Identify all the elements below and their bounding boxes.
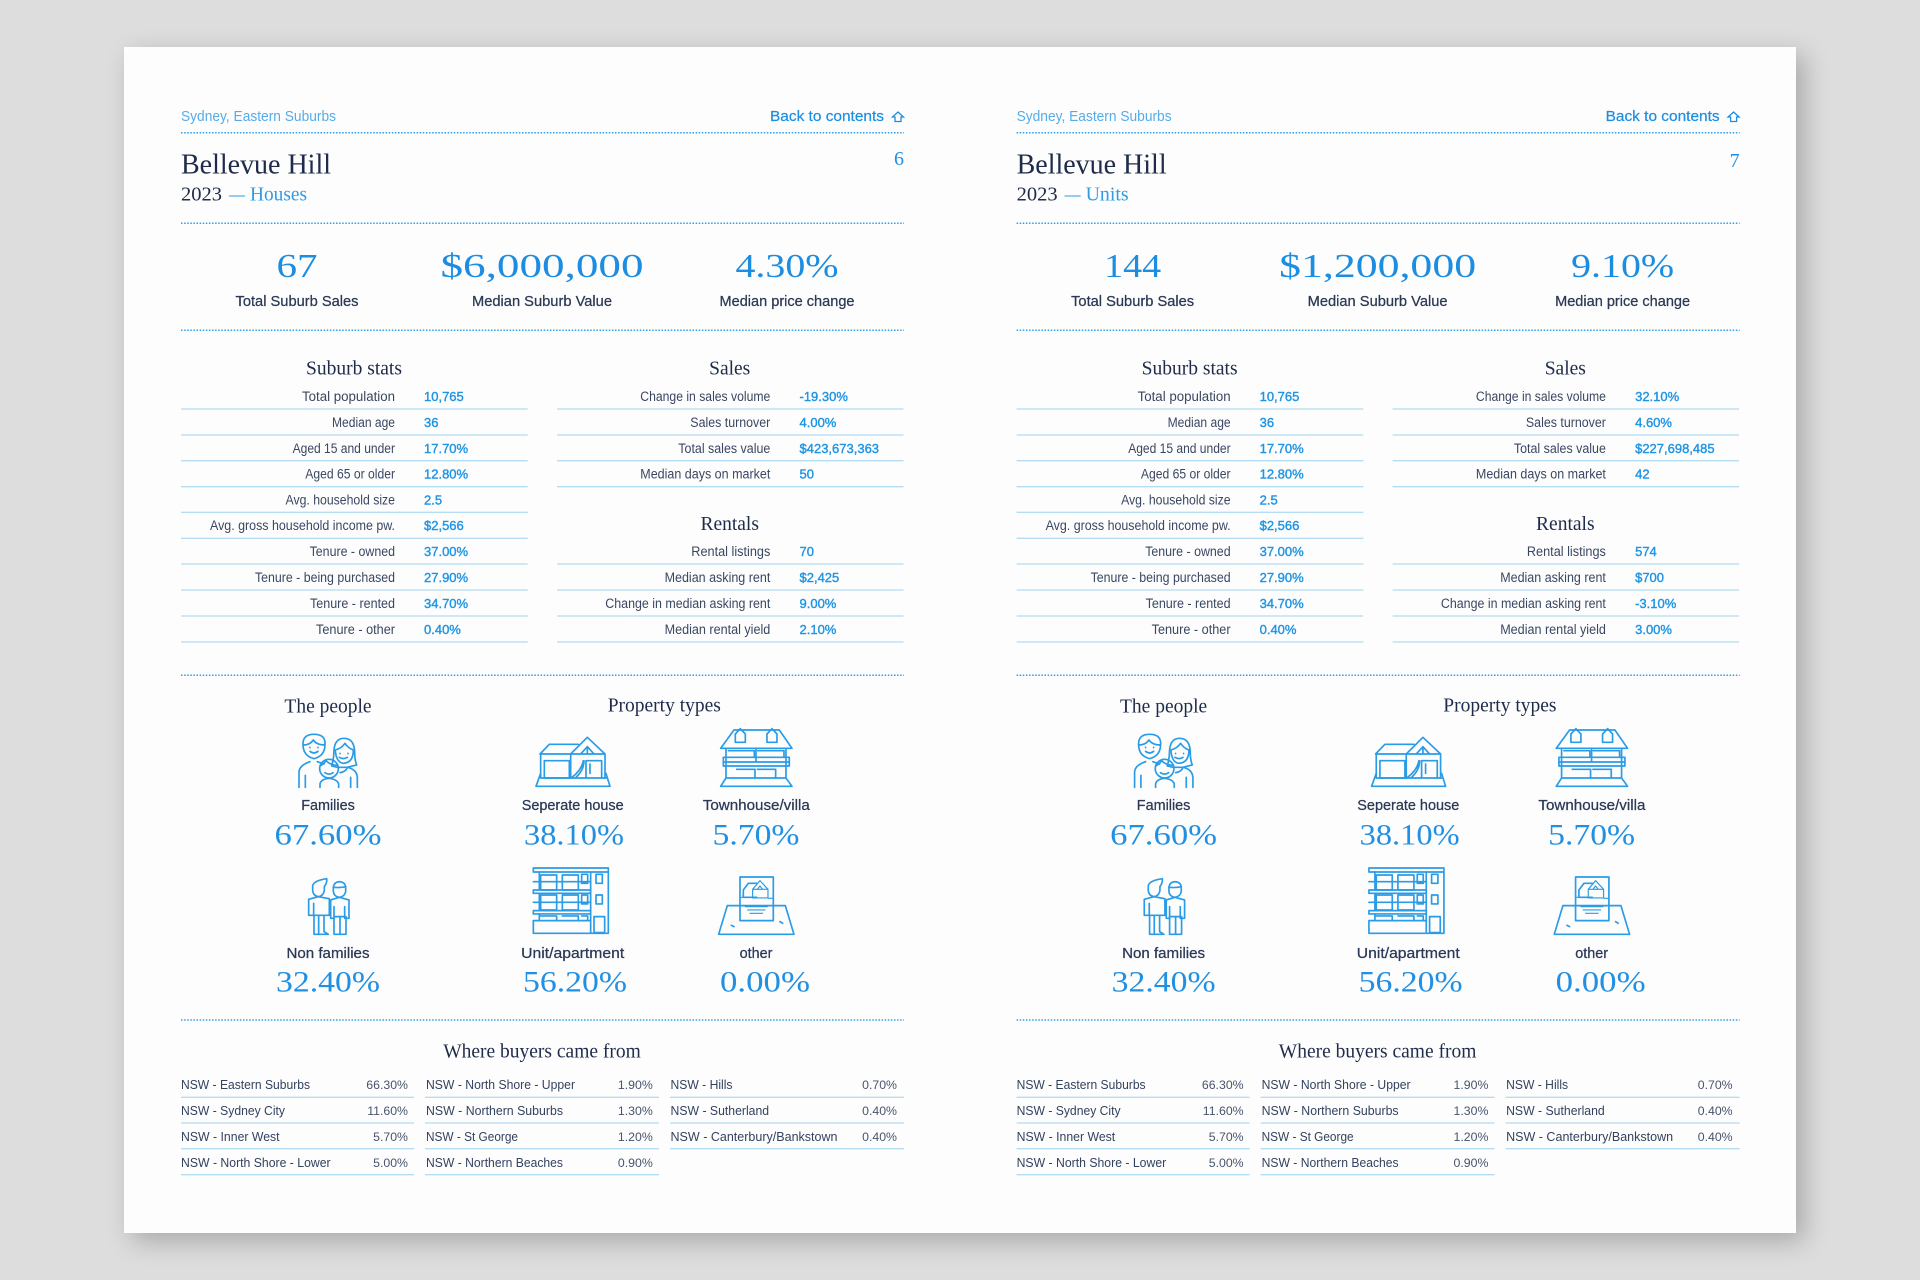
table: suburb stats: Avg. gross household income pw. — [210, 518, 395, 533]
headline stats: $1,200,000 — [1279, 248, 1476, 285]
icon: non family — [309, 879, 349, 934]
table: suburb stats: Tenure - being purchased — [255, 570, 395, 585]
panel: property types: Property types — [1443, 696, 1557, 717]
page header: Back to contents — [770, 109, 884, 125]
table: sales: $423,673,363 — [800, 441, 879, 456]
table: where buyers came from: 5.70% — [1209, 1130, 1244, 1144]
table: sales: Sales — [1545, 358, 1586, 379]
panel: property types: 56.20% — [1359, 966, 1463, 999]
table: suburb stats: Avg. household size — [286, 492, 395, 507]
page header: Sydney, Eastern Suburbs — [1017, 109, 1172, 125]
headline stats: 4.30% — [736, 248, 838, 285]
title block — [181, 148, 904, 223]
table: suburb stats: 36 — [1260, 415, 1274, 430]
table: where buyers came from: 0.70% — [862, 1078, 897, 1092]
panel: property types — [181, 696, 904, 1020]
icon: non family — [1144, 879, 1185, 934]
headline stats: Median price change — [1555, 294, 1690, 310]
table: where buyers came from: NSW - North Shore - Lower — [1017, 1155, 1167, 1170]
icon: townhouse — [1556, 729, 1628, 786]
table: where buyers came from: NSW - Sutherland — [670, 1103, 769, 1118]
table: sales: Median days on market — [640, 467, 771, 482]
table: sales: $227,698,485 — [1635, 441, 1715, 456]
table: rentals: Rentals — [700, 514, 759, 535]
table: sales: 42 — [1635, 467, 1650, 482]
table: where buyers came from: NSW - Northern Beaches — [426, 1155, 563, 1170]
table: where buyers came from: 0.90% — [618, 1156, 653, 1170]
table: where buyers came from: 0.40% — [1698, 1104, 1733, 1118]
table: suburb stats: 17.70% — [1260, 441, 1304, 456]
icon: apartment — [533, 868, 608, 933]
panel: the people: Non families — [286, 946, 370, 962]
table: sales: Total sales value — [1514, 441, 1606, 456]
table: suburb stats: Suburb stats — [1142, 358, 1238, 379]
table: rentals: $700 — [1635, 570, 1664, 585]
icon: other — [1554, 877, 1630, 934]
title block: Units — [1086, 185, 1129, 206]
table: suburb stats: Total population — [1138, 389, 1231, 404]
table: where buyers came from: 1.30% — [1454, 1104, 1488, 1118]
table: where buyers came from: NSW - North Shore - Upper — [426, 1077, 576, 1092]
table: suburb stats — [181, 358, 528, 642]
panel: the people — [274, 697, 382, 999]
table: where buyers came from: 1.20% — [1454, 1130, 1488, 1144]
table: rentals — [1017, 514, 1740, 675]
panel: property types: 56.20% — [523, 966, 627, 999]
table: suburb stats: Suburb stats — [306, 358, 402, 379]
table: sales: Change in sales volume — [640, 389, 770, 404]
table: suburb stats: Aged 15 and under — [293, 441, 395, 456]
headline stats: 9.10% — [1571, 248, 1674, 285]
headline stats — [181, 248, 904, 330]
table: where buyers came from: NSW - St George — [1262, 1129, 1354, 1144]
table: rentals: Rental listings — [691, 544, 771, 559]
table: rentals: 9.00% — [800, 596, 837, 611]
table: where buyers came from: NSW - St George — [426, 1129, 518, 1144]
title block: Houses — [250, 185, 307, 206]
icon: separate house — [1372, 737, 1446, 786]
table: where buyers came from: NSW - North Shore - Lower — [181, 1155, 331, 1170]
table: where buyers came from: 1.30% — [618, 1104, 653, 1118]
table: sales: Sales turnover — [690, 415, 771, 430]
headline stats: Median Suburb Value — [472, 294, 612, 310]
headline stats: $6,000,000 — [440, 248, 644, 285]
table: where buyers came from: 5.70% — [373, 1130, 408, 1144]
table: suburb stats: 10,765 — [424, 389, 464, 404]
table: where buyers came from: NSW - Northern Suburbs — [426, 1103, 563, 1118]
table: where buyers came from: NSW - Northern Suburbs — [1262, 1103, 1399, 1118]
table: where buyers came from — [181, 1042, 904, 1175]
table: sales: 32.10% — [1635, 389, 1680, 404]
table: suburb stats: Avg. gross household income pw. — [1046, 518, 1231, 533]
panel: the people: 67.60% — [274, 818, 382, 851]
table: where buyers came from: 1.20% — [618, 1130, 653, 1144]
table: rentals: 2.10% — [800, 622, 837, 637]
table: suburb stats: 37.00% — [1260, 544, 1304, 559]
table: suburb stats: 0.40% — [1260, 622, 1297, 637]
page header: Sydney, Eastern Suburbs — [181, 109, 336, 125]
table: where buyers came from: 0.90% — [1454, 1156, 1488, 1170]
panel: the people: Families — [1137, 798, 1190, 814]
table: where buyers came from: NSW - Sydney City — [181, 1103, 286, 1118]
icon: other — [719, 877, 794, 934]
panel: the people: Non families — [1122, 946, 1205, 962]
table: where buyers came from: NSW - Eastern Suburbs — [181, 1077, 310, 1092]
table: suburb stats — [1017, 358, 1363, 642]
headline stats: Total Suburb Sales — [236, 294, 358, 310]
table: sales: 4.00% — [800, 415, 837, 430]
table: suburb stats: Tenure - rented — [1146, 596, 1231, 611]
headline stats: 67 — [276, 248, 318, 285]
table: suburb stats: Tenure - owned — [310, 544, 395, 559]
table: where buyers came from: NSW - Inner West — [1017, 1129, 1116, 1144]
table: sales — [557, 358, 904, 487]
icon: townhouse — [721, 729, 792, 786]
table: sales: Median days on market — [1476, 467, 1606, 482]
table: where buyers came from: 11.60% — [367, 1104, 408, 1118]
title block: 7 — [1730, 150, 1740, 172]
headline stats: Median price change — [720, 294, 854, 310]
table: where buyers came from: NSW - Canterbury/Bankstown — [1506, 1129, 1673, 1144]
panel: the people: 32.40% — [1112, 966, 1216, 999]
table: rentals: Rental listings — [1527, 544, 1606, 559]
table: rentals: Median rental yield — [1500, 622, 1606, 637]
title block: — — [1064, 185, 1081, 206]
table: rentals: Median asking rent — [665, 570, 771, 585]
table: where buyers came from: 5.00% — [1209, 1156, 1244, 1170]
table: sales: Total sales value — [678, 441, 770, 456]
table: suburb stats: Avg. household size — [1121, 492, 1231, 507]
panel: property types: Townhouse/villa — [703, 798, 810, 814]
table: suburb stats: 27.90% — [424, 570, 469, 585]
table: suburb stats: Median age — [332, 415, 395, 430]
panel: property types: 5.70% — [712, 818, 800, 851]
title block: 2023 — [181, 185, 222, 206]
table: suburb stats: Tenure - being purchased — [1091, 570, 1231, 585]
table: sales: Sales — [709, 358, 750, 379]
panel: the people: The people — [1120, 697, 1207, 718]
table: where buyers came from: NSW - Northern Beaches — [1262, 1155, 1399, 1170]
panel: property types: 0.00% — [720, 966, 810, 999]
panel: the people: The people — [284, 697, 372, 718]
title block: 2023 — [1017, 185, 1058, 206]
title block: 6 — [894, 148, 904, 170]
table: where buyers came from: NSW - Inner West — [181, 1129, 280, 1144]
table: suburb stats: Tenure - other — [1152, 622, 1231, 637]
table: where buyers came from: 0.70% — [1698, 1078, 1733, 1092]
table: sales: -19.30% — [800, 389, 848, 404]
left page: Houses — [181, 109, 904, 1175]
table: rentals: Change in median asking rent — [1441, 596, 1606, 611]
icon: family — [299, 734, 357, 787]
table: sales: Sales turnover — [1526, 415, 1606, 430]
panel: property types: Property types — [608, 696, 721, 717]
table: rentals: Median rental yield — [665, 622, 770, 637]
table: where buyers came from: Where buyers came from — [443, 1042, 641, 1063]
headline stats: 144 — [1104, 248, 1161, 285]
headline stats — [1017, 248, 1740, 330]
table: where buyers came from: 66.30% — [1202, 1078, 1244, 1092]
title block — [1017, 149, 1740, 223]
table: where buyers came from: 11.60% — [1203, 1104, 1244, 1118]
table: suburb stats: Aged 65 or older — [1141, 467, 1231, 482]
table: rentals: 574 — [1635, 544, 1657, 559]
panel: the people: 32.40% — [276, 966, 380, 999]
table: where buyers came from: NSW - Hills — [1506, 1077, 1568, 1092]
table: where buyers came from: 66.30% — [366, 1078, 408, 1092]
title block: — — [228, 185, 245, 206]
table: suburb stats: 2.5 — [424, 492, 442, 507]
table: suburb stats: 12.80% — [1260, 467, 1304, 482]
table: rentals: 70 — [800, 544, 814, 559]
table: rentals: $2,425 — [800, 570, 839, 585]
page header: Back to contents — [1606, 109, 1720, 125]
table: suburb stats: 34.70% — [424, 596, 469, 611]
table: where buyers came from: NSW - North Shore - Upper — [1262, 1077, 1411, 1092]
table: suburb stats: Aged 65 or older — [305, 467, 395, 482]
panel: property types: Seperate house — [1357, 798, 1459, 814]
panel: property types: 38.10% — [524, 818, 624, 851]
right page: Units — [1017, 109, 1740, 1175]
table: where buyers came from: 5.00% — [373, 1156, 408, 1170]
table: sales — [1393, 358, 1739, 487]
table: where buyers came from: 1.90% — [618, 1078, 653, 1092]
table: where buyers came from: NSW - Sutherland — [1506, 1103, 1605, 1118]
table: where buyers came from: 0.40% — [1698, 1130, 1733, 1144]
table: suburb stats: 10,765 — [1260, 389, 1299, 404]
table: suburb stats: $2,566 — [424, 518, 464, 533]
table: suburb stats: Tenure - other — [316, 622, 396, 637]
table: where buyers came from: NSW - Canterbury/Bankstown — [670, 1129, 838, 1144]
table: where buyers came from: 0.40% — [862, 1104, 897, 1118]
table: suburb stats: 27.90% — [1260, 570, 1304, 585]
table: suburb stats: 2.5 — [1260, 492, 1278, 507]
icon: family — [1135, 734, 1193, 787]
table: suburb stats: Tenure - owned — [1145, 544, 1231, 559]
panel: property types: Unit/apartment — [521, 946, 624, 962]
table: suburb stats: Tenure - rented — [310, 596, 395, 611]
table: rentals: Change in median asking rent — [605, 596, 771, 611]
panel: property types: other — [1575, 946, 1608, 962]
table: where buyers came from: NSW - Sydney City — [1017, 1103, 1121, 1118]
table: suburb stats: 36 — [424, 415, 438, 430]
table: sales: 4.60% — [1635, 415, 1672, 430]
headline stats: Total Suburb Sales — [1071, 294, 1194, 310]
page header — [1017, 109, 1740, 133]
icon: apartment — [1369, 868, 1444, 933]
table: sales: Change in sales volume — [1476, 389, 1606, 404]
table: where buyers came from — [1017, 1042, 1740, 1175]
icon: separate house — [536, 737, 610, 786]
table: suburb stats: 12.80% — [424, 467, 469, 482]
panel: the people — [1110, 697, 1217, 999]
table: rentals — [181, 514, 904, 675]
page header — [181, 109, 904, 133]
table: suburb stats: 34.70% — [1260, 596, 1304, 611]
table: suburb stats: 0.40% — [424, 622, 461, 637]
headline stats: Median Suburb Value — [1308, 294, 1448, 310]
table: rentals: Rentals — [1536, 514, 1595, 535]
table: where buyers came from: 1.90% — [1454, 1078, 1488, 1092]
table: sales: 50 — [800, 467, 814, 482]
panel: property types: 38.10% — [1360, 818, 1460, 851]
table: where buyers came from: NSW - Hills — [670, 1077, 732, 1092]
table: where buyers came from: NSW - Eastern Suburbs — [1017, 1077, 1146, 1092]
panel: property types — [1017, 696, 1740, 1020]
table: rentals: -3.10% — [1635, 596, 1677, 611]
table: suburb stats: $2,566 — [1260, 518, 1299, 533]
panel: property types: Unit/apartment — [1357, 946, 1460, 962]
table: rentals: Median asking rent — [1500, 570, 1606, 585]
table: suburb stats: Total population — [302, 389, 395, 404]
table: where buyers came from: 0.40% — [862, 1130, 897, 1144]
panel: the people: Families — [301, 798, 355, 814]
panel: property types: 5.70% — [1548, 818, 1635, 851]
table: suburb stats: 37.00% — [424, 544, 469, 559]
table: suburb stats: 17.70% — [424, 441, 469, 456]
table: rentals: 3.00% — [1635, 622, 1672, 637]
table: suburb stats: Aged 15 and under — [1128, 441, 1231, 456]
panel: property types: Townhouse/villa — [1538, 798, 1645, 814]
table: suburb stats: Median age — [1168, 415, 1231, 430]
title block: Bellevue Hill — [181, 149, 331, 180]
table: where buyers came from: Where buyers came from — [1279, 1042, 1476, 1063]
title block: Bellevue Hill — [1017, 149, 1167, 180]
panel: the people: 67.60% — [1110, 818, 1217, 851]
panel: property types: other — [740, 946, 773, 962]
panel: property types: 0.00% — [1556, 966, 1646, 999]
panel: property types: Seperate house — [522, 798, 624, 814]
